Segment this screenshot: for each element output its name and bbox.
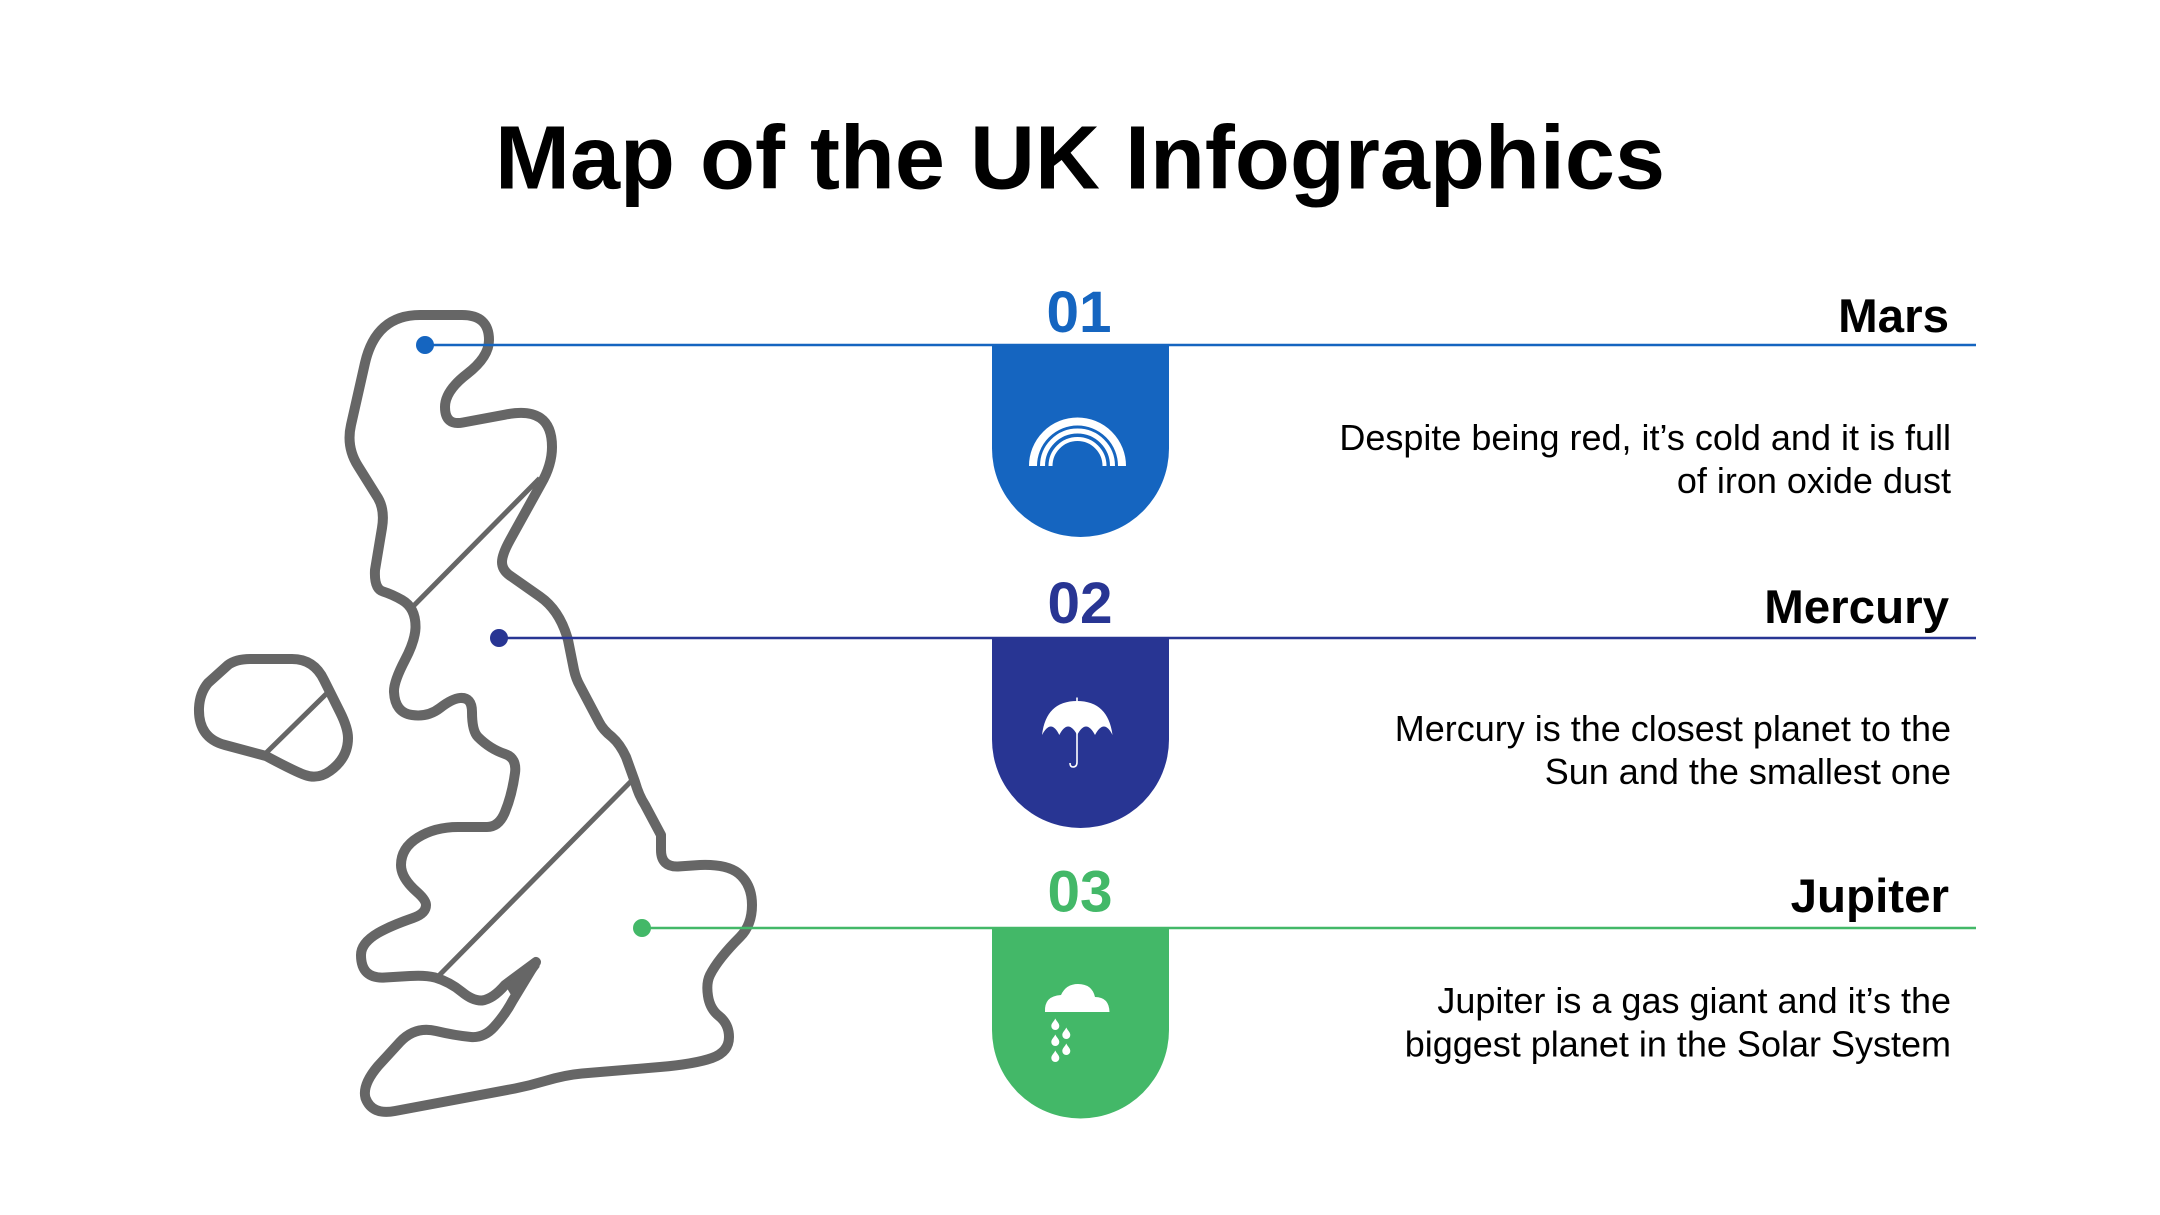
heading: Mercury: Mercury (1764, 581, 1950, 634)
item 01: Mars (416, 280, 1976, 537)
description: Jupiter: Jupiter is a gas giant and it’s the (1437, 980, 1951, 1021)
shield 03 (992, 928, 1169, 1118)
description: Mercury: Sun and the smallest one (1545, 751, 1951, 792)
map: Great Britain outline (350, 315, 752, 1112)
connector line 01 (425, 344, 1976, 346)
map: Scotland border (413, 478, 540, 607)
location dot 02 (490, 629, 508, 647)
description: Mars: of iron oxide dust (1677, 460, 1951, 501)
map: Bristol Channel wedge (505, 961, 540, 1000)
map: Wales and England border (440, 781, 632, 975)
number 02: 02 (1047, 571, 1113, 636)
number 03: 03 (1047, 860, 1113, 924)
heading: Jupiter: Jupiter (1791, 870, 1949, 923)
map: Ireland outline (199, 659, 348, 777)
description: Mercury: Mercury is the closest planet to the (1395, 708, 1951, 749)
icon: rainbow (1033, 422, 1122, 466)
item 03: Jupiter (633, 860, 1976, 1118)
location dot 01 (416, 336, 434, 354)
heading: Mars: Mars (1838, 290, 1949, 343)
location dot 03 (633, 919, 651, 937)
icon: rain cloud (1045, 984, 1110, 1062)
item 02: Mercury (490, 571, 1976, 828)
map of the UK (199, 315, 752, 1112)
description: Mars: Despite being red, it’s cold and it is full (1339, 417, 1951, 458)
map: Ireland border (266, 692, 328, 753)
title: Map of the UK Infographics (495, 108, 1665, 208)
connector line 03 (642, 927, 1976, 929)
icon: umbrella (1042, 698, 1112, 767)
description: Jupiter: biggest planet in the Solar System (1405, 1024, 1951, 1064)
connector line 02 (499, 637, 1976, 639)
shield 02 (992, 638, 1169, 828)
shield 01 (992, 345, 1169, 537)
number 01: 01 (1046, 280, 1112, 345)
